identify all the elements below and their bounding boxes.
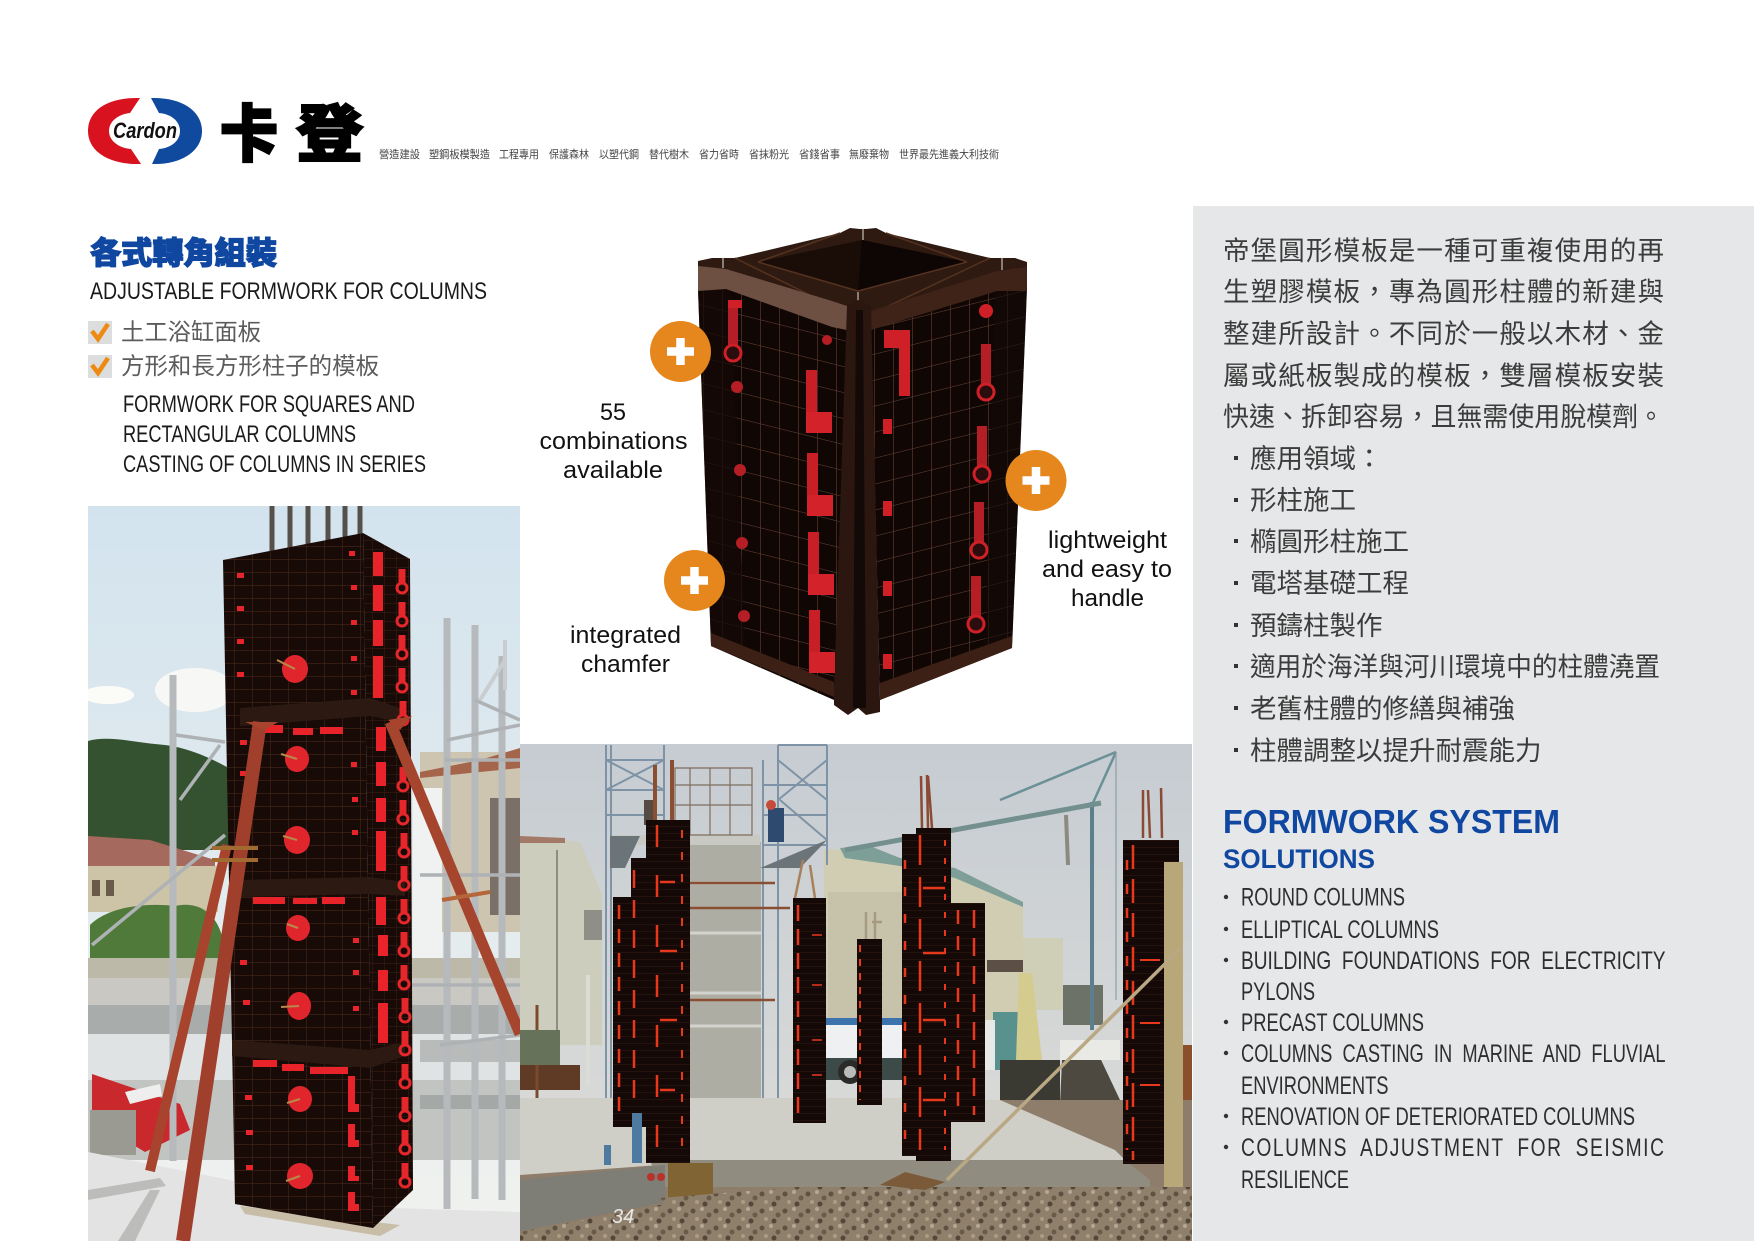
chinese applications list: 適用於海洋與河川環境中的柱體澆置 [1250,652,1660,682]
brand name: 卡登: 登 [296,101,363,170]
side keyholes [397,569,410,1187]
columns [613,897,648,1127]
slab edge [650,1160,1150,1187]
right face [871,289,1027,700]
callout text: integrated [570,622,681,649]
callout text [1042,527,1172,612]
building behind right [420,752,520,932]
english solutions list: RESILIENCE [1241,1166,1349,1194]
rebars [272,506,360,556]
center post [834,300,880,715]
tagline row: 世界最先進義大利技術 [899,147,999,161]
chinese applications list: 形柱施工 [1250,486,1356,516]
right top band [871,267,1027,330]
blue pipes [632,1113,642,1163]
red billboard [92,1074,190,1152]
column red marks [619,825,1160,1160]
tagline row: 替代樹木 [649,147,689,161]
callout text [540,399,688,484]
checklist item 1: 土工浴缸面板 [121,319,261,345]
english solutions list [1224,884,1666,1194]
callout: integrated chamfer [570,550,725,678]
inner opening [758,240,967,291]
top surface [698,228,1027,316]
checklist item 2: 方形和長方形柱子的模板 [121,353,379,379]
rebars on columns [795,775,1162,939]
chinese intro paragraph: 生塑膠模板，專為圓形柱體的新建與 [1223,277,1664,307]
scaffold poles [173,618,502,1209]
ground [520,1100,1192,1241]
english feature list: CASTING OF COLUMNS IN SERIES [123,451,426,478]
left face [698,287,847,700]
left building [520,838,602,1045]
chinese intro paragraph: 帝堡圓形模板是一種可重複使用的再 [1223,236,1664,266]
workers [768,808,784,842]
tagline row: 無廢棄物 [849,147,889,161]
heading: 各式轉角組裝: 各式轉角組裝 [90,236,277,271]
english solutions list: PRECAST COLUMNS [1241,1009,1424,1037]
callout text: chamfer [581,651,670,678]
column side [363,533,413,1228]
heading: solutions: SOLUTIONS [1223,844,1375,874]
callout text: and easy to [1042,556,1172,583]
subheading: ADJUSTABLE FORMWORK FOR COLUMNS [90,278,487,305]
chinese applications list: 老舊柱體的修繕與補強 [1250,694,1515,724]
callout text: available [563,457,663,484]
icon: plus badge [1006,450,1066,511]
ground bands [88,958,520,978]
chinese applications list: 應用領域： [1250,444,1382,474]
tagline row: 保護森林 [549,147,589,161]
tagline row: 營造建設 [379,147,420,161]
tagline row: 工程專用 [499,148,539,161]
chinese applications list [1234,444,1660,766]
tagline row [379,147,999,161]
right edge dark strip [985,289,1027,648]
english feature list: RECTANGULAR COLUMNS [123,421,356,448]
concrete floor [88,1152,520,1241]
callout: lightweight [1006,450,1172,612]
side strip marks [373,552,383,576]
chinese intro paragraph: 快速、拆卸容易，且無需使用脫模劑。 [1223,402,1664,432]
callout text: 55 [600,399,626,426]
house [88,836,215,868]
timber post and brace [1164,862,1183,1187]
brand name: 卡登 [220,101,363,170]
central concrete core [689,842,761,1104]
bottom bands [711,633,834,697]
tie pins [277,660,300,1181]
far buildings [824,848,1023,1030]
english solutions list: PYLONS [1241,978,1315,1006]
icon: checkbox 1 [88,321,112,344]
icon: plus badge [650,321,711,382]
truck [826,1025,902,1058]
product: 3D formwork column [698,228,1027,715]
tagline row: 省錢省事 [799,147,840,161]
left edge dark strip [698,287,745,650]
chinese applications list: 橢圓形柱施工 [1250,527,1409,557]
english solutions list: ROUND COLUMNS [1241,884,1405,912]
callout text: handle [1071,585,1144,612]
tagline row: 以塑代鋼 [599,147,639,161]
platforms [610,836,827,868]
red parts right face [883,304,994,669]
callout text: combinations [540,428,688,455]
tagline row: 塑鋼板模製造 [429,147,490,161]
photo: construction site with columns [520,744,1192,1241]
chinese intro paragraph: 屬或紙板製成的模板，雙層模板安裝 [1223,361,1664,391]
callout text [570,622,681,678]
english solutions list: ELLIPTICAL COLUMNS [1241,916,1439,944]
english feature list [123,391,426,478]
chinese applications list: 柱體調整以提升耐震能力 [1250,736,1542,766]
english solutions list: ENVIRONMENTS [1241,1072,1388,1100]
panel: description [1193,206,1754,1241]
concrete slab [520,1098,1125,1175]
photo: single column with braces [82,506,520,1241]
brand name: 卡登: 卡 [220,101,278,170]
excavator [993,1012,1018,1070]
stacked timber [520,1065,580,1090]
logo: Cardon [88,98,202,164]
chinese applications list: 電塔基礎工程 [1250,568,1409,598]
gravel [520,1187,1192,1241]
red tie discs [282,655,313,1189]
tagline row: 省抹粉光 [749,147,789,161]
callout: 55 combinations [540,321,711,484]
crane [845,752,1116,1030]
bushes [90,905,225,960]
red front marks [237,551,388,1211]
page number: 34 [612,1206,634,1228]
checklist [88,319,379,379]
chinese applications list: 預鑄柱製作 [1250,611,1382,641]
belts [240,698,400,726]
left top band [698,266,847,330]
column front [223,533,373,1228]
icon: checkbox 2 [88,355,112,378]
logo: Cardon: Cardon [113,118,177,143]
tagline row: 省力省時 [699,148,739,161]
callout text: lightweight [1048,527,1167,554]
heading: formwork system: FORMWORK SYSTEM [1223,803,1560,840]
hill [88,739,232,850]
icon: plus badge [664,550,725,611]
scaffold [606,745,827,1103]
red parts left face [725,300,835,673]
chinese intro paragraph: 整建所設計。不同於一般以木材、金 [1223,319,1664,349]
chinese intro paragraph [1223,236,1664,432]
braces [183,722,260,1241]
english feature list: FORMWORK FOR SQUARES AND [123,391,415,418]
